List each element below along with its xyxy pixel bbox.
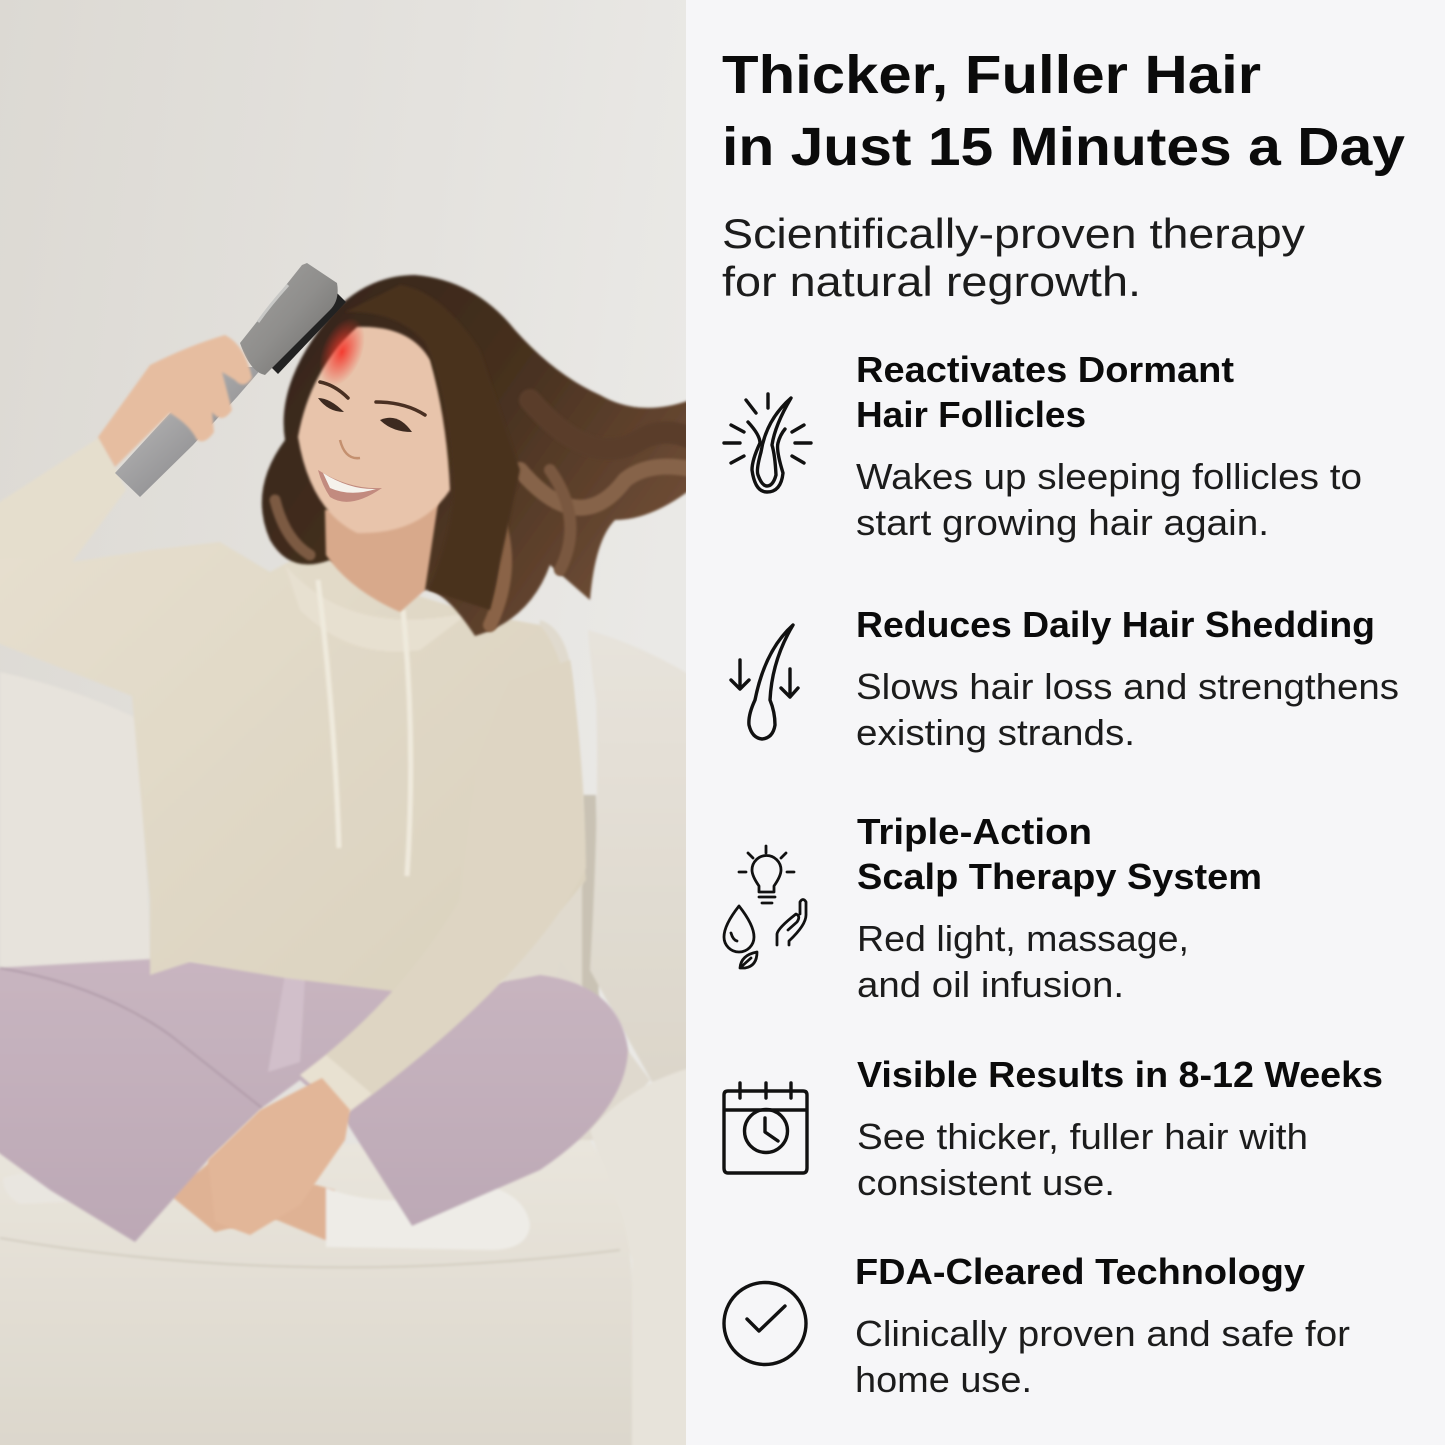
facial features xyxy=(318,382,425,502)
sweater xyxy=(0,437,586,1115)
hair locks xyxy=(275,400,695,625)
icon: check mark in circle xyxy=(724,1282,806,1364)
face xyxy=(298,327,450,533)
hair back xyxy=(262,275,690,636)
brush device xyxy=(115,263,346,497)
description xyxy=(856,456,1362,543)
description: Wakes up sleeping follicles to xyxy=(856,456,1362,497)
description xyxy=(856,666,1399,753)
heading: Scalp Therapy System xyxy=(857,856,1262,897)
heading: Reactivates Dormant xyxy=(856,349,1234,390)
benefit: triple-action therapy xyxy=(724,811,1262,1005)
description: home use. xyxy=(855,1359,1032,1400)
neck xyxy=(325,490,440,612)
icon: light bulb, oil drop, leaf and hand xyxy=(724,846,806,968)
hair front xyxy=(345,285,520,610)
description: Red light, massage, xyxy=(857,918,1189,959)
icon: hair strand with down arrows xyxy=(731,625,798,739)
legs and feet xyxy=(0,958,628,1250)
left sock xyxy=(3,1173,95,1204)
sofa xyxy=(0,620,690,1445)
heading: Triple-Action xyxy=(857,811,1092,852)
subtitle xyxy=(722,210,1305,305)
red light glow xyxy=(320,320,364,384)
heading: FDA-Cleared Technology xyxy=(855,1251,1305,1292)
description xyxy=(855,1313,1350,1400)
benefit: FDA-cleared xyxy=(724,1251,1350,1400)
benefit: visible results xyxy=(724,1054,1383,1203)
wall background xyxy=(0,0,686,1146)
description: See thicker, fuller hair with xyxy=(857,1116,1308,1157)
heading xyxy=(856,349,1234,435)
title xyxy=(722,45,1405,177)
description xyxy=(857,1116,1308,1203)
title: in Just 15 Minutes a Day xyxy=(722,117,1405,177)
subtitle: for natural regrowth. xyxy=(722,258,1141,305)
raised hand xyxy=(98,335,252,467)
description: and oil infusion. xyxy=(857,964,1124,1005)
subtitle: Scientifically-proven therapy xyxy=(722,210,1305,257)
icon: calendar with clock xyxy=(724,1083,807,1173)
description: Slows hair loss and strengthens xyxy=(856,666,1399,707)
lower hand xyxy=(208,1078,350,1235)
heading: Visible Results in 8-12 Weeks xyxy=(857,1054,1383,1095)
heading: Hair Follicles xyxy=(856,394,1086,435)
description: start growing hair again. xyxy=(856,502,1269,543)
description xyxy=(857,918,1189,1005)
description: Clinically proven and safe for xyxy=(855,1313,1350,1354)
title: Thicker, Fuller Hair xyxy=(722,45,1261,105)
description: consistent use. xyxy=(857,1162,1115,1203)
panel: text background xyxy=(686,0,1445,1445)
benefit: reduces shedding xyxy=(731,604,1399,753)
benefit: reactivates follicles xyxy=(724,349,1362,543)
heading: Reduces Daily Hair Shedding xyxy=(856,604,1375,645)
heading xyxy=(857,811,1262,897)
icon: glowing hair follicle xyxy=(724,394,811,492)
photo: woman using red light therapy brush on a sofa xyxy=(0,0,695,1445)
description: existing strands. xyxy=(856,712,1135,753)
